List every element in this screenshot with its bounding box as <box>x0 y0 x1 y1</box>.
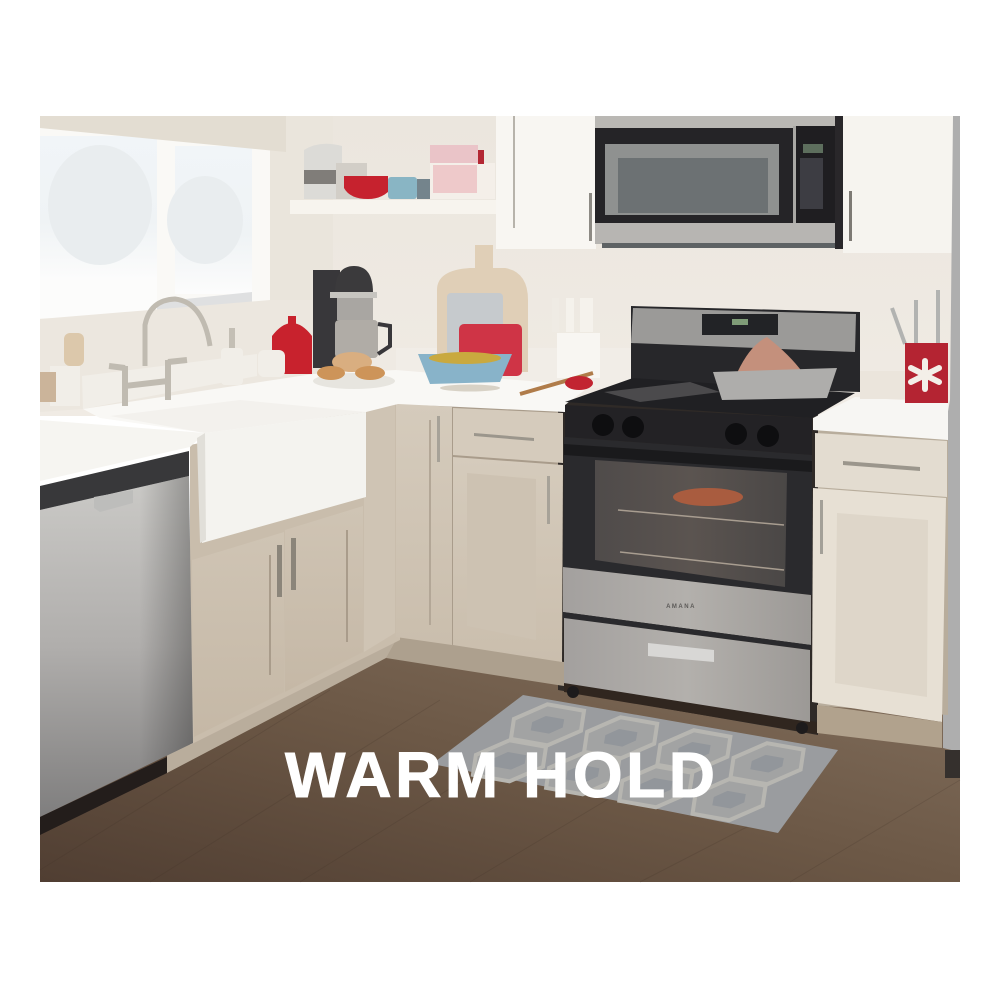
can <box>336 163 367 199</box>
cooktop <box>565 378 855 418</box>
right toe kick <box>817 705 942 748</box>
upper right cabinet <box>843 116 953 253</box>
towels <box>430 145 478 165</box>
tall door <box>453 457 563 662</box>
corner door <box>396 403 452 645</box>
title: WARM HOLD <box>285 739 715 811</box>
food on counter <box>313 352 593 394</box>
shelf with items <box>290 144 496 214</box>
plate of rolls <box>313 373 395 389</box>
turkey <box>737 337 803 373</box>
backsplash <box>40 300 312 412</box>
jar <box>258 350 285 377</box>
roasting pan <box>713 368 837 400</box>
right cabinet drawer <box>815 433 947 497</box>
rug <box>432 695 838 833</box>
knobs <box>592 414 614 436</box>
upper left cabinet <box>496 116 596 249</box>
lower panel <box>563 567 811 645</box>
shadow under range <box>564 683 817 734</box>
left toe kick <box>167 632 396 773</box>
utensil crock <box>552 298 600 378</box>
window blind <box>40 116 286 152</box>
sink door left <box>192 532 284 737</box>
faucet <box>109 299 210 406</box>
range <box>563 306 860 734</box>
window <box>40 116 286 326</box>
top drawer <box>453 408 563 463</box>
wall <box>40 116 960 416</box>
backguard <box>631 306 860 392</box>
base cabinets <box>190 402 947 748</box>
casserole dish <box>418 354 512 384</box>
dishwasher <box>40 451 193 835</box>
coffee maker <box>313 266 390 368</box>
brand label: AMANA <box>666 604 696 610</box>
floor <box>40 640 960 882</box>
end panel <box>364 403 395 652</box>
oven door <box>563 437 812 595</box>
drawer <box>564 618 810 722</box>
snowflake <box>911 361 939 389</box>
cutting boards <box>437 245 528 376</box>
red bowl <box>344 176 388 199</box>
utensil jar <box>892 290 948 403</box>
gap backing behind cabinets <box>386 400 948 735</box>
countertops <box>40 370 948 481</box>
sink door right <box>285 506 363 692</box>
microwave <box>595 116 843 249</box>
farmhouse sink <box>110 400 366 543</box>
right cabinet door <box>812 488 946 722</box>
corner wall section <box>270 116 333 376</box>
brush holder <box>40 333 84 406</box>
wooden spoon <box>520 373 593 394</box>
control panel <box>565 405 812 455</box>
soap dispenser <box>221 328 243 385</box>
fridge edge <box>943 116 960 778</box>
mugs <box>388 177 417 199</box>
legs <box>567 686 579 698</box>
right toe kick <box>386 630 564 686</box>
red canister <box>272 316 312 374</box>
handles <box>277 545 282 597</box>
kitchen photo <box>40 116 960 882</box>
bag <box>304 144 342 199</box>
